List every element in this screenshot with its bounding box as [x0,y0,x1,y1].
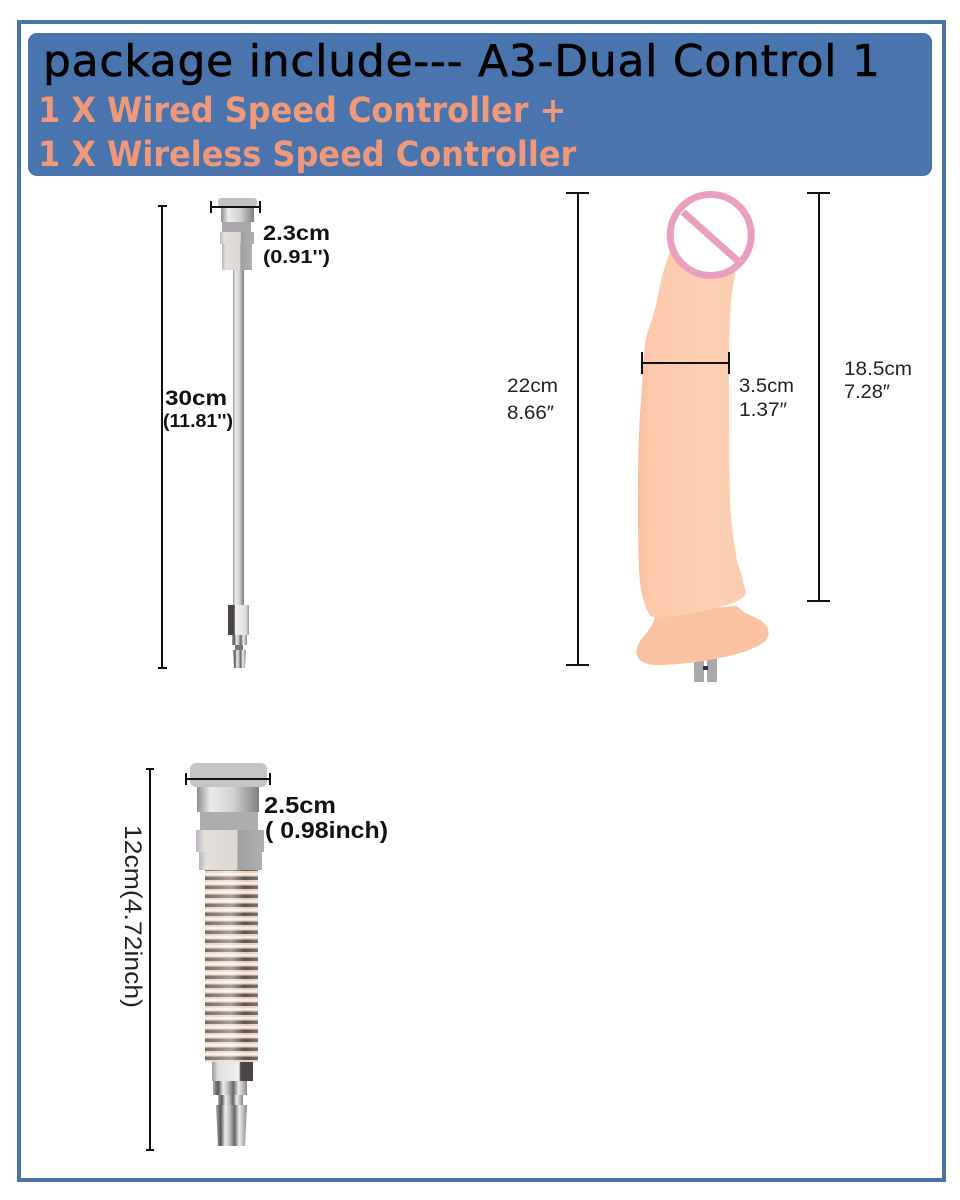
dimension: spring length [146,769,154,1150]
title: package include--- A3-Dual Control 1 [43,36,881,87]
label: 30cm: 30cm [165,387,227,410]
label: 2.3cm: 2.3cm [263,222,330,245]
flesh-tone product silhouette [637,225,769,682]
icon: prohibition censor mark [670,194,751,276]
label: 2.3cm: (0.91'') [263,246,330,267]
label: 22cm [507,376,558,424]
label: 22cm: 8.66″ [507,403,554,424]
label: 2.5cm: ( 0.98inch) [265,817,388,843]
label: 18.5cm: 7.28″ [844,382,890,403]
label: 2.5cm: 2.5cm [264,792,336,818]
label: 2.3cm [263,222,330,267]
label: 22cm: 22cm [507,376,558,397]
long rod adapter [218,198,257,668]
dimension: diameter [642,352,729,374]
dimension: overall length [566,193,589,665]
label: 18.5cm [844,359,912,403]
label: 30cm [163,387,233,431]
label: 18.5cm: 18.5cm [844,359,912,380]
label: 3.5cm: 3.5cm [739,376,794,397]
short spring adapter [190,763,267,1146]
label: 3.5cm [739,376,794,421]
header panel [28,33,932,176]
label: 3.5cm: 1.37″ [739,400,787,421]
wireless controller line: 1 X Wireless Speed Controller [38,135,576,175]
dimension: insertable length [807,193,830,601]
label: 30cm: (11.81'') [163,410,233,431]
dimension: rod length [158,206,167,668]
label: 12cm vertical: 12cm(4.72inch) [119,825,146,1008]
dimension: spring head width [186,773,270,785]
dimension: rod head width [210,201,261,213]
wired controller line: 1 X Wired Speed Controller + [38,91,566,131]
label: 2.5cm [264,792,388,843]
